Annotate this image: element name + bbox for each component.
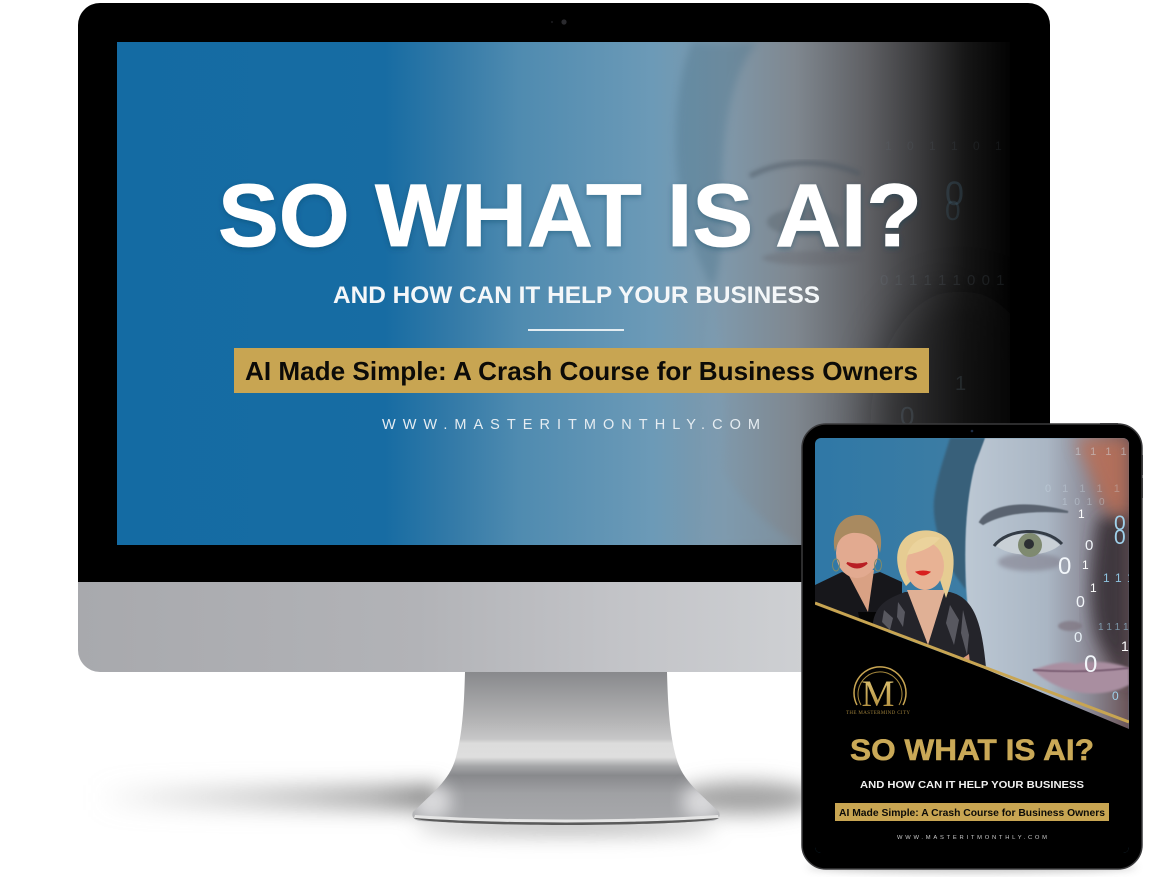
nose shadow: [1058, 621, 1082, 631]
binary digits: 0: [1114, 526, 1126, 549]
binary digits: 0: [1084, 651, 1097, 678]
tablet camera: [971, 430, 973, 432]
orange glow: [1075, 438, 1129, 520]
cheek dark side: [1091, 510, 1129, 690]
monitor screen: [117, 42, 1050, 570]
divider: [528, 329, 624, 331]
faint face photo: 1 0 1 1 0 1: [885, 139, 1008, 153]
binary digits: 1: [1078, 507, 1085, 521]
monitor gold banner: [234, 348, 929, 393]
monitor title: SO WHAT IS AI?: [218, 165, 922, 265]
gold diagonal stripe: [815, 603, 1129, 722]
tablet gold banner: [835, 803, 1109, 821]
tablet shadow: [807, 861, 1137, 873]
faint face photo: 0: [900, 401, 914, 431]
binary digits: 0: [1076, 594, 1085, 611]
binary digits: 0: [1114, 512, 1126, 535]
woman left: [815, 515, 902, 635]
monitor subtitle: AND HOW CAN IT HELP YOUR BUSINESS: [333, 282, 820, 309]
binary digits: 1 1 1 1: [1103, 571, 1147, 585]
face: [934, 438, 1129, 735]
binary digits: 0: [1058, 553, 1071, 580]
faint face photo: 0 1 1 1 1 1 0 0 1: [880, 272, 1005, 289]
logo: [846, 667, 910, 716]
tablet side buttons: [1100, 423, 1143, 498]
monitor: [78, 3, 1050, 672]
monitor stand: [412, 672, 722, 825]
faint face photo: 0: [945, 175, 964, 213]
binary digits: 1: [1090, 581, 1097, 595]
tablet url: WWW.MASTERITMONTHLY.COM: [897, 835, 1047, 841]
eye: [994, 531, 1062, 571]
tablet: [802, 423, 1147, 869]
binary digits: 1: [1121, 638, 1129, 654]
tablet screen photo: [815, 438, 1147, 853]
tablet subtitle: AND HOW CAN IT HELP YOUR BUSINESS: [860, 779, 1084, 791]
monitor silver chin: [78, 582, 1050, 672]
binary digits: [1046, 448, 1129, 700]
binary digits: 0 1 1 1 1: [1045, 483, 1124, 495]
logo: THE MASTERMIND CITY: [846, 711, 910, 716]
logo: M: [862, 674, 894, 715]
monitor black bezel: [78, 3, 1050, 582]
binary digits: 1 0 1 0: [1062, 497, 1107, 508]
faint face photo: 0: [945, 195, 961, 226]
skin: [965, 438, 1129, 735]
tablet body: [802, 424, 1142, 869]
monitor url: WWW.MASTERITMONTHLY.COM: [382, 417, 760, 433]
woman right: [873, 530, 986, 668]
tablet title: SO WHAT IS AI?: [850, 734, 1094, 767]
binary digits: 1: [1082, 558, 1089, 572]
binary digits: 0: [1074, 629, 1082, 646]
binary digits: 1 1 1 1 1: [1075, 446, 1145, 458]
black lower panel: [815, 605, 1129, 853]
hair: [934, 438, 990, 590]
faint face photo: 1: [955, 373, 966, 395]
eyebrow: [980, 505, 1068, 524]
stand shadow: [95, 782, 815, 835]
lips: [1033, 662, 1129, 693]
faint face photo: [676, 42, 1004, 542]
tablet gold banner: AI Made Simple: A Crash Course for Business Owners: [839, 807, 1105, 819]
binary digits: 0: [1085, 537, 1093, 554]
binary digits: 1 1 1 1: [1098, 622, 1129, 633]
binary digits: 0: [1112, 689, 1119, 703]
camera: [551, 19, 567, 25]
monitor gold banner: AI Made Simple: A Crash Course for Business Owners: [245, 356, 918, 386]
